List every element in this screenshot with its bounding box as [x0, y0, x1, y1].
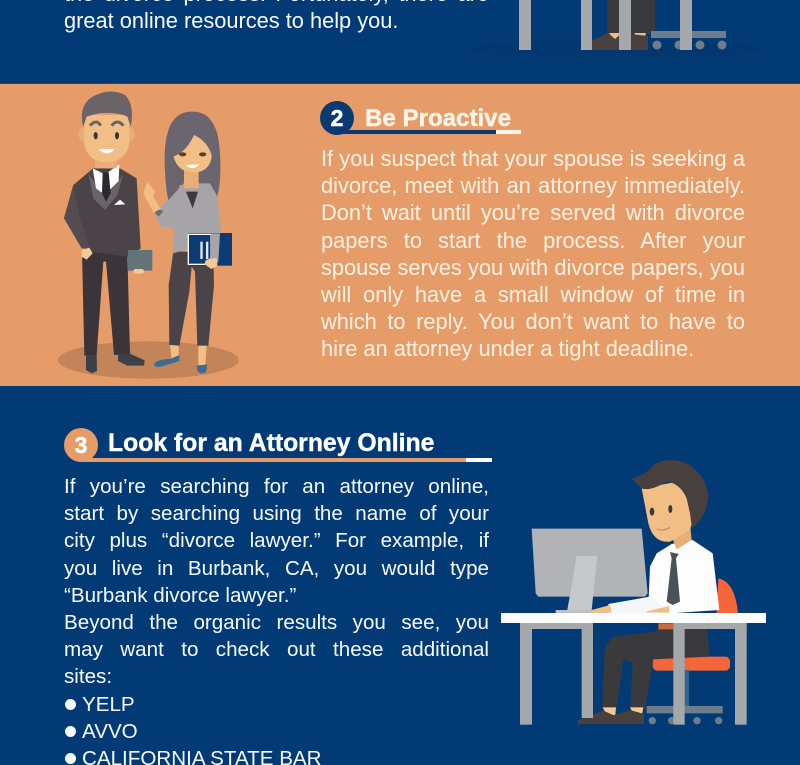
text: section 2 body: papers to start the process. After your: [321, 228, 745, 253]
monitor: [532, 529, 648, 597]
panel: section 2 Be Proactive: [0, 83, 800, 386]
text: section 2 body: [321, 146, 745, 361]
text: section 3 body: If you’re searching for an attorney online,: [64, 475, 489, 498]
bullet: [65, 753, 76, 764]
text: section 1 closing lines: great online resources to help you.: [64, 8, 398, 33]
text: section 2 body: divorce, meet with an attorney immediately.: [321, 173, 745, 198]
legs: [602, 627, 710, 708]
text: section 3 body: start by searching using the name of your: [64, 502, 489, 525]
woman's jacket: [155, 183, 222, 253]
man's jacket: [64, 168, 141, 257]
title: Be Proactive: [365, 105, 511, 132]
woman's legs: [169, 252, 214, 346]
underline accent: [466, 458, 492, 462]
number badge: 3: [75, 432, 87, 458]
man's legs: [82, 252, 130, 356]
head: [672, 523, 692, 549]
illustration: man and woman in business clothes: [58, 92, 239, 379]
text: section 2 body: spouse serves you with divorce papers, you: [321, 255, 745, 280]
panel: section 3 Look for an Attorney Online: [0, 386, 800, 765]
text: section 3 body: may want to check out these additional: [64, 638, 489, 661]
illustration: desk legs and feet: [519, 0, 726, 50]
chair: [717, 578, 738, 613]
item: YELP: [82, 693, 135, 716]
underline accent: [496, 130, 521, 134]
text: section 2 body: If you suspect that your spouse is seeking a: [321, 146, 745, 171]
text: section 2 body: hire an attorney under a tight deadline.: [321, 336, 694, 361]
panel: section 1 remainder: [0, 0, 800, 83]
number badge: 2: [331, 105, 343, 131]
man's head: [95, 148, 117, 168]
woman's head: [184, 168, 199, 188]
number badge: [64, 428, 98, 462]
text: section 2 body: will only have a small window of time in: [321, 282, 745, 307]
text: section 3 body: Beyond the organic results you see, you: [64, 611, 489, 634]
text: section 3 body: [64, 475, 489, 688]
woman's blue folder: [188, 233, 232, 266]
text: section 3 body: you live in Burbank, CA, you would type: [64, 557, 489, 580]
text: section 3 body: “Burbank divorce lawyer.”: [64, 584, 296, 607]
item: AVVO: [82, 720, 138, 743]
man's folder: [128, 250, 152, 271]
text: section 3 body: sites:: [64, 665, 112, 688]
text: section 3 body: city plus “divorce lawyer.” For example, if: [64, 529, 489, 552]
text: section 1 closing lines: [64, 0, 489, 33]
illustration: man working at a desk computer: [501, 460, 766, 725]
heading: Look for an Attorney Online with number badge: [64, 428, 492, 462]
heading: Be Proactive with number badge: [320, 101, 521, 135]
text: section 2 body: which to reply. You don’t want to have to: [321, 309, 745, 334]
underline: [81, 458, 466, 462]
title: Look for an Attorney Online: [108, 430, 434, 457]
number badge: [320, 101, 354, 135]
text: section 2 body: Don’t wait until you’re served with divorce: [321, 200, 745, 225]
list: additional sites: [65, 693, 322, 765]
woman's hair back: [165, 112, 220, 207]
desk: [501, 613, 766, 623]
bullet: [65, 699, 76, 710]
shirt: [648, 540, 719, 613]
underline: [337, 130, 496, 134]
bullet: [65, 726, 76, 737]
